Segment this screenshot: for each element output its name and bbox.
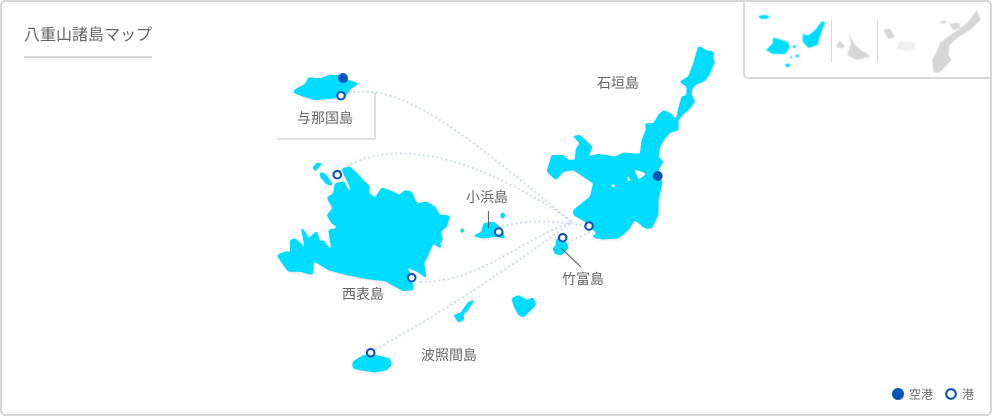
island: Yonaguni bbox=[293, 75, 359, 100]
label box: Yonaguni bbox=[277, 92, 375, 139]
label box: Yonaguni: 与那国島 bbox=[297, 110, 353, 126]
airport: Yonaguni bbox=[338, 73, 348, 83]
island: Hateruma bbox=[353, 355, 392, 372]
inset: Okinawa islands bbox=[883, 10, 981, 72]
inset: Yaeyama islands bbox=[759, 15, 825, 67]
label: Hateruma: 波照間島 bbox=[421, 347, 477, 363]
port: Kohama bbox=[495, 228, 503, 236]
dotted ferry routes bbox=[340, 92, 590, 351]
island: Ishigaki bbox=[547, 46, 715, 239]
island: Taketomi bbox=[553, 237, 568, 255]
port: Yonaguni bbox=[337, 92, 345, 99]
title bbox=[24, 26, 152, 58]
airport: Ishigaki bbox=[653, 171, 663, 181]
label: Iriomote: 西表島 bbox=[342, 286, 384, 302]
port: Iriomote south bbox=[408, 274, 416, 282]
inset: Miyako islands bbox=[836, 33, 871, 60]
leader line: Taketomi bbox=[561, 248, 581, 267]
island: Kohama bbox=[459, 212, 505, 238]
legend: airport: 空港 bbox=[909, 388, 933, 402]
legend: port: 港 bbox=[962, 388, 974, 402]
label: Ishigaki: 石垣島 bbox=[597, 75, 639, 91]
label: Taketomi: 竹富島 bbox=[562, 271, 604, 287]
port: Hateruma bbox=[367, 349, 375, 357]
port: Taketomi bbox=[559, 234, 566, 242]
title: 八重山諸島マップ bbox=[24, 26, 152, 44]
legend bbox=[892, 388, 974, 402]
port: Ishigaki bbox=[585, 222, 593, 230]
port: Iriomote north bbox=[334, 171, 341, 178]
inset locator map bbox=[744, 1, 991, 78]
label: Kohama: 小浜島 bbox=[466, 189, 508, 205]
islands: Kuroshima and Aragusuku bbox=[453, 295, 536, 322]
leader line: Kohama bbox=[488, 211, 490, 228]
island: Iriomote bbox=[277, 163, 464, 291]
